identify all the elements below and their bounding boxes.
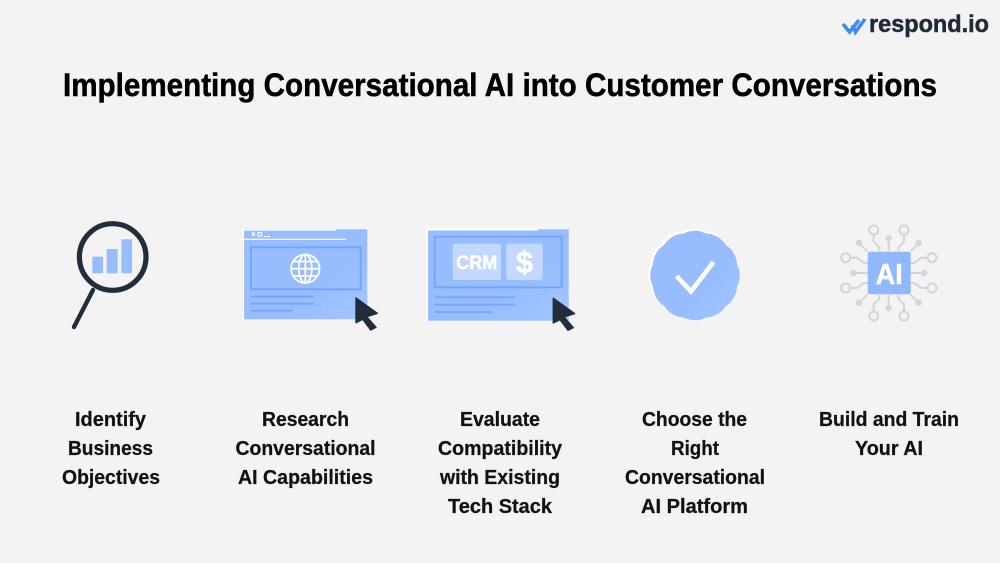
label: research conversational ai capabilities: AI Capabilities <box>238 467 373 489</box>
label: choose the right conversational ai platform: Choose the <box>642 409 747 431</box>
step 1: identify business objectives <box>62 224 160 489</box>
label: evaluate compatibility with existing tech stack: Evaluate <box>460 409 540 431</box>
icon: cursor <box>553 298 575 330</box>
label: evaluate compatibility with existing tech stack: Compatibility <box>438 438 563 460</box>
label: choose the right conversational ai platform: AI Platform <box>641 496 748 518</box>
icon: verified badge with check <box>649 229 740 320</box>
icon: AI chip with circuit: AI <box>876 259 903 291</box>
icon: magnifying glass with bar chart <box>74 224 146 327</box>
icon: browser window with CRM and dollar: $ <box>516 244 533 280</box>
label: build and train your ai <box>819 409 959 460</box>
label: evaluate compatibility with existing tech stack: with Existing <box>439 467 560 489</box>
label: identify business objectives: Business <box>68 438 153 460</box>
label: evaluate compatibility with existing tech stack <box>438 409 563 518</box>
label: identify business objectives: Objectives <box>62 467 160 489</box>
label: evaluate compatibility with existing tech stack: Tech Stack <box>448 496 553 518</box>
label: research conversational ai capabilities <box>236 409 376 489</box>
step 5: build and train <box>819 226 959 460</box>
label: choose the right conversational ai platform: Right <box>671 438 719 460</box>
label: identify business objectives <box>62 409 160 489</box>
step 4: choose the platform <box>625 229 765 518</box>
label: research conversational ai capabilities: Conversational <box>236 438 376 460</box>
icon: browser window with CRM and dollar: CRM <box>456 253 497 274</box>
icon: browser window with CRM and dollar <box>427 229 575 330</box>
label: research conversational ai capabilities: Research <box>262 409 349 431</box>
label: choose the right conversational ai platform: Conversational <box>625 467 765 489</box>
title: Implementing Conversational AI into Customer Conversations <box>63 67 937 103</box>
step 2: research capabilities <box>236 229 377 489</box>
label: build and train your ai: Your AI <box>855 438 923 460</box>
logo: respond.io: respond.io <box>869 11 989 38</box>
icon: cursor <box>356 298 377 330</box>
icon: browser window with globe <box>240 229 377 330</box>
step 3: evaluate compatibility <box>427 229 575 518</box>
label: identify business objectives: Identify <box>75 409 147 431</box>
label: build and train your ai: Build and Train <box>819 409 959 431</box>
icon: AI chip with circuit <box>841 226 936 320</box>
label: choose the right conversational ai platform <box>625 409 765 518</box>
